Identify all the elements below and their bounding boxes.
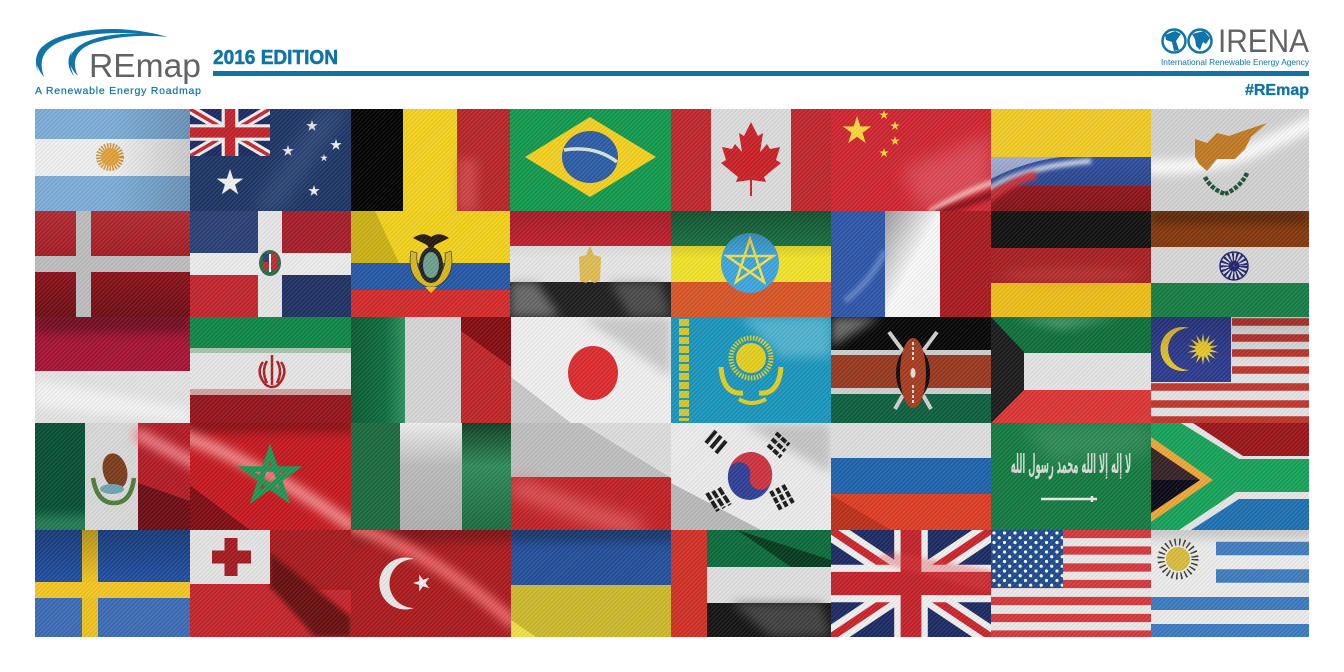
red cross [212, 538, 251, 576]
olive branches [1205, 173, 1247, 194]
logo wordmark: REmap [89, 47, 201, 84]
flag: Turkey [351, 530, 511, 637]
icon: REmap swooshes [36, 29, 168, 77]
flag: Colombia [991, 109, 1151, 211]
flag: Germany [991, 211, 1151, 317]
flag: Japan [511, 317, 671, 423]
coat of arms [93, 451, 134, 503]
flag: France [831, 211, 991, 317]
flag: South Korea [671, 423, 831, 530]
flag: United States [991, 530, 1151, 637]
stars [217, 120, 342, 196]
stars [843, 110, 900, 157]
icon: infinity globes [1162, 30, 1212, 52]
flag: South Africa [1151, 423, 1309, 530]
flag: Kuwait [991, 317, 1151, 423]
chakra [1220, 252, 1248, 280]
flag: Indonesia [35, 317, 190, 423]
crescent [1160, 327, 1189, 371]
flag: Denmark [35, 211, 190, 317]
logo: REmap [35, 29, 201, 97]
flag: Tonga [190, 530, 351, 637]
sun of May [1161, 542, 1195, 576]
emblem [721, 233, 779, 293]
star [1187, 333, 1219, 365]
flag: Malaysia [1151, 317, 1309, 423]
sun emblem [99, 146, 121, 168]
stars [991, 530, 1063, 588]
emblem [260, 355, 284, 387]
flag: Canada [671, 109, 831, 211]
flag: Kenya [831, 317, 991, 423]
flag: United Arab Emirates [671, 530, 831, 637]
flag: Saudi Arabia [991, 423, 1151, 530]
flag: Russia [831, 423, 991, 530]
shield and spears [889, 332, 937, 409]
sun and eagle [721, 338, 781, 403]
flag: Australia [190, 109, 351, 211]
flag: Kazakhstan [671, 317, 831, 423]
coat of arms [410, 234, 452, 293]
sword [1041, 496, 1097, 502]
flag: China [831, 109, 991, 211]
flag: Belgium [351, 109, 510, 211]
flag: Mexico [35, 423, 190, 530]
flag: Egypt [510, 211, 671, 317]
logo subtitle: International Renewable Energy Agency [1161, 57, 1310, 67]
flag: Nigeria [351, 423, 511, 530]
coat of arms [259, 250, 281, 276]
header rule [213, 71, 1309, 76]
logo wordmark: IRENA [1218, 23, 1310, 59]
flag: Iran [190, 317, 351, 423]
maple leaf [721, 122, 781, 196]
flag: Brazil [510, 109, 671, 211]
green star [246, 452, 294, 497]
crescent [379, 558, 414, 610]
black trapezoid [991, 317, 1024, 423]
eagle emblem [579, 246, 601, 283]
heading: edition: 2016 EDITION [213, 47, 338, 69]
flag: Argentina [35, 109, 190, 211]
flag: India [1151, 211, 1309, 317]
island [1195, 123, 1267, 171]
hashtag: #REmap [1245, 82, 1309, 99]
flag: Italy [351, 317, 511, 423]
flag: Uruguay [1151, 530, 1309, 637]
ornament [679, 319, 689, 421]
shahada inscription: لا إله إلا الله محمد رسول الله [1011, 449, 1131, 480]
logo: IRENA [1161, 23, 1310, 67]
taegeuk [723, 447, 777, 505]
globe [562, 131, 618, 183]
flag: Dominican Republic [190, 211, 351, 317]
flag: Sweden [35, 530, 190, 637]
flag: Ukraine [511, 530, 671, 637]
flag: Morocco [190, 423, 351, 530]
flag: Ecuador [351, 211, 510, 317]
flag: Cyprus [1151, 109, 1309, 211]
flag: United Kingdom [831, 530, 991, 637]
trigrams [706, 431, 793, 511]
flag grid [29, 109, 1321, 640]
star [413, 574, 429, 592]
red disc [568, 346, 618, 400]
logo tagline: A Renewable Energy Roadmap [35, 85, 201, 97]
flag: Ethiopia [671, 211, 831, 317]
flag: Poland [511, 423, 671, 530]
